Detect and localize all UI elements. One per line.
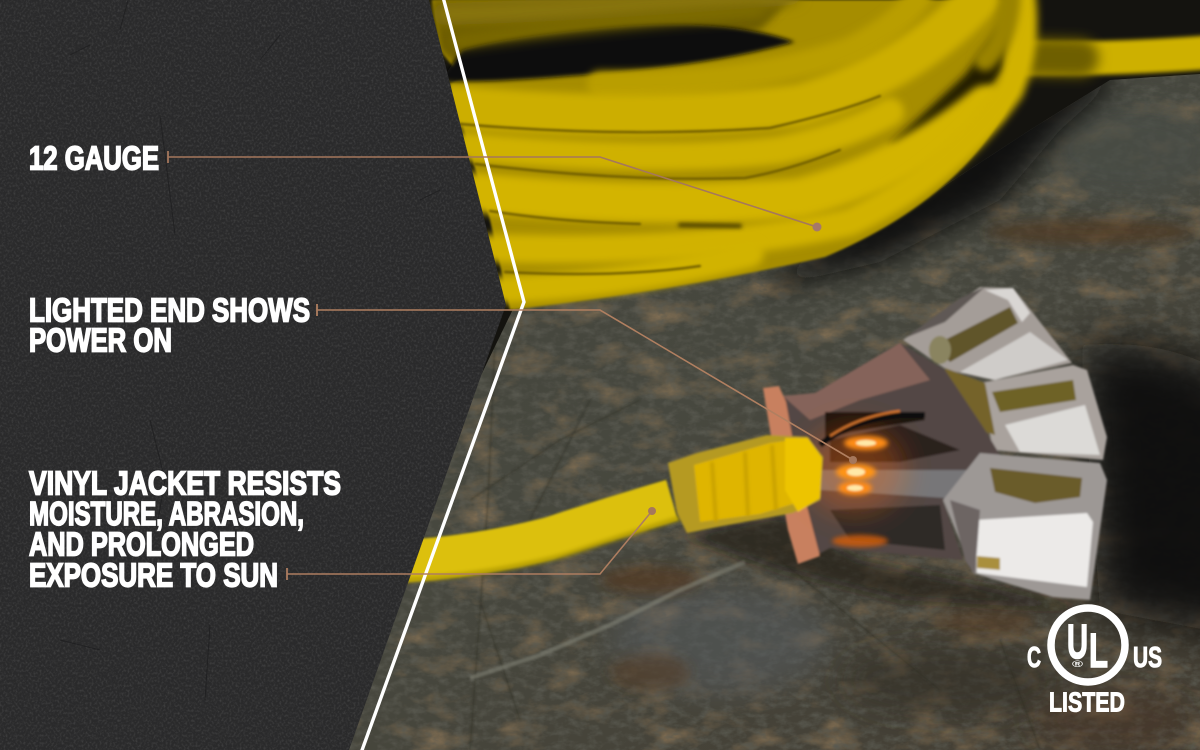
body xyxy=(783,343,1000,560)
plug shadow xyxy=(1080,344,1200,640)
strand shadow lines xyxy=(460,96,880,274)
white angled divider xyxy=(361,0,524,750)
dark wedge xyxy=(890,25,1005,150)
small yellow cord xyxy=(405,500,680,580)
floor scratches xyxy=(470,340,1040,750)
leader: vinyl jacket xyxy=(287,507,656,580)
coil strands xyxy=(445,0,790,14)
far cord xyxy=(1020,52,1200,58)
label: vinyl jacket: EXPOSURE TO SUN xyxy=(29,556,278,594)
dark left panel xyxy=(0,0,520,750)
coil base xyxy=(432,0,1029,310)
middle prong head xyxy=(980,365,1107,460)
label: vinyl jacket: AND PROLONGED xyxy=(29,526,254,562)
glow xyxy=(805,425,905,515)
UL listed logo: US xyxy=(1133,642,1162,674)
yellow strain relief xyxy=(668,435,823,533)
UL listed logo: C xyxy=(1027,642,1041,674)
photo background xyxy=(349,0,1200,750)
label: 12 gauge: 12 GAUGE xyxy=(29,140,159,176)
lighted plug xyxy=(668,287,1107,600)
label: vinyl jacket: VINYL JACKET RESISTS xyxy=(29,464,341,502)
label: vinyl jacket xyxy=(29,464,341,594)
UL listed logo: ® xyxy=(1072,659,1084,669)
UL listed logo: L xyxy=(1089,625,1108,678)
label: lighted end xyxy=(29,292,310,358)
UL listed logo: LISTED xyxy=(1049,686,1125,718)
label: lighted end: LIGHTED END SHOWS xyxy=(29,292,310,328)
leader: 12 gauge xyxy=(168,151,822,232)
dark hole in coil xyxy=(440,24,795,82)
metal floor xyxy=(349,74,1200,750)
coiled yellow cord xyxy=(432,0,1200,310)
top prong head xyxy=(903,287,1072,380)
UL listed logo xyxy=(1027,608,1162,718)
bottom prong head xyxy=(943,453,1107,600)
label: lighted end: POWER ON xyxy=(29,322,172,358)
UL listed logo: U xyxy=(1067,616,1088,669)
label: vinyl jacket: MOISTURE, ABRASION, xyxy=(29,495,304,532)
leader: lighted end xyxy=(317,304,857,464)
flange xyxy=(763,386,820,564)
coil shadow xyxy=(760,70,1120,290)
